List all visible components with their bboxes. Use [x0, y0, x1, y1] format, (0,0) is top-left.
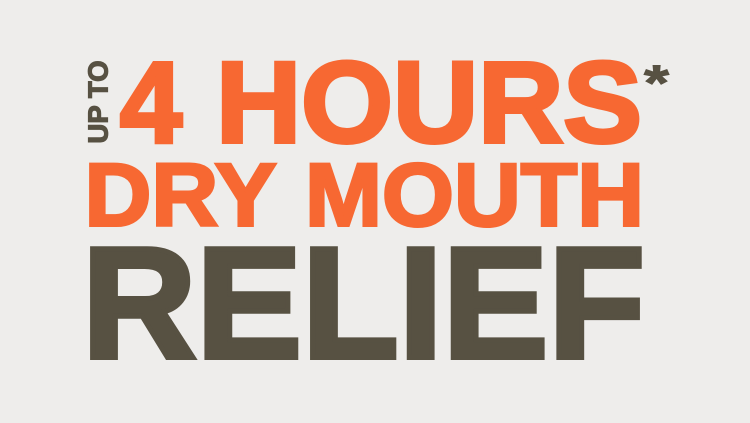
heading: 4: 4 — [120, 39, 182, 167]
footnote asterisk: * — [644, 55, 670, 111]
label: up to: UP TO — [82, 60, 114, 144]
heading word: dry: DRY — [84, 144, 276, 244]
heading: relief: RELIEF — [82, 216, 645, 392]
heading word: mouth: MOUTH — [305, 144, 644, 244]
heading: hours: HOURS — [216, 39, 642, 167]
heading: dry mouth — [84, 144, 644, 244]
